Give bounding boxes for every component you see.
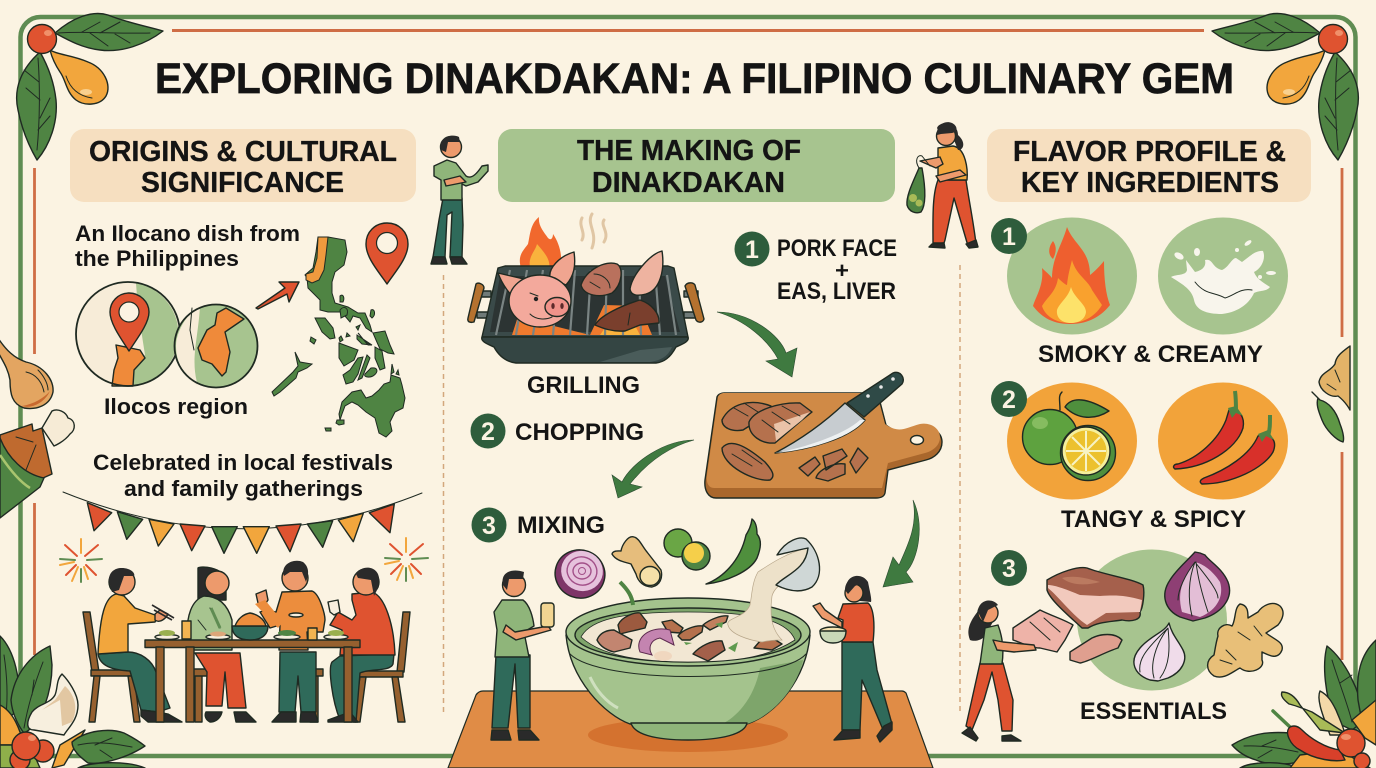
badge: 2: 2: [1002, 386, 1016, 414]
flavor: creamy: [1158, 218, 1288, 334]
arrow: grill to board: [717, 312, 797, 377]
icon: firework right: [385, 538, 428, 581]
icon: green chili: [706, 519, 760, 584]
heading: origins: [70, 129, 416, 202]
ingredients: essentials: [1013, 550, 1283, 690]
person: diner yellow sweater: [98, 568, 182, 722]
text: Ilocano dish: the Philippines: [75, 246, 239, 271]
person: man with bottle: [491, 571, 554, 740]
icon: calamansi: [664, 529, 710, 570]
illustration: mixing bowl: [566, 548, 810, 740]
corner ornament: top right: [1212, 14, 1358, 160]
corner ornament: bottom right: [1232, 640, 1376, 768]
person: diner green sweater: [187, 567, 256, 722]
badge: 1: [991, 218, 1027, 254]
badge: 2: [991, 381, 1027, 417]
badge: 1: 1: [1002, 223, 1016, 251]
corner ornament: bottom left: [0, 636, 145, 768]
map inset: region close up with pin: [76, 282, 180, 386]
label: essentials: ESSENTIALS: [1080, 698, 1227, 725]
bunting: [63, 492, 422, 553]
flavor: tangy: [1007, 382, 1137, 500]
map inset: region close up: [174, 304, 258, 388]
arrow: to map: [256, 282, 299, 309]
badge: 3: [991, 550, 1027, 586]
icon: grill with pork: [468, 214, 704, 363]
heading: making: THE MAKING OF: [577, 135, 801, 167]
badge: 3: 3: [1002, 555, 1016, 583]
person: woman carrying meat: [962, 601, 1036, 741]
text: festivals: Celebrated in local festivals: [93, 450, 393, 475]
heading: flavor: [987, 129, 1311, 202]
step 1: pork face label: PORK FACE: [777, 235, 897, 262]
icon: ginger: [612, 537, 662, 587]
step 1: pork face label: 1: [745, 236, 759, 264]
icon: cutting board with knife: [705, 372, 942, 498]
icon: pig face: [498, 252, 575, 327]
table shadow: [588, 718, 788, 752]
text: festivals: and family gatherings: [124, 476, 363, 501]
label: smoky and creamy: SMOKY & CREAMY: [1038, 341, 1263, 368]
heading: making: [498, 129, 895, 202]
step 1: pork face label: [734, 232, 897, 305]
text: Ilocano dish: [75, 221, 300, 271]
heading: making: DINAKDAKAN: [592, 167, 785, 199]
corner ornament: top left: [17, 14, 163, 160]
step 2: chopping label: CHOPPING: [515, 419, 644, 446]
panel: origins and cultural significance: [60, 129, 428, 722]
arrow: board to mixing: [612, 440, 694, 498]
step 3: mixing label: 3: [482, 512, 496, 540]
illustration: family at table: [83, 561, 410, 722]
step 1: pork face label: +: [835, 258, 849, 283]
icon: onion half: [548, 543, 612, 605]
side ornament: ginger and chili: [1312, 346, 1350, 442]
person: woman with bowl: [813, 576, 892, 742]
step 1: pork face label: EAS, LIVER: [777, 278, 896, 305]
text: Ilocano dish: An Ilocano dish from: [75, 221, 300, 246]
heading: flavor: FLAVOR PROFILE &: [1013, 136, 1286, 168]
heading: origins: SIGNIFICANCE: [141, 167, 344, 199]
text: festivals: [93, 450, 393, 501]
flavor: smoky: [1007, 218, 1137, 334]
step 2: chopping label: [470, 414, 644, 448]
title: EXPLORING DINAKDAKAN: A FILIPINO CULINARY GEM: [155, 55, 1234, 103]
panel: the making of dinakdakan: [431, 122, 978, 768]
heading: flavor: KEY INGREDIENTS: [1021, 167, 1279, 199]
person: presenter man: [431, 136, 488, 264]
label: tangy and spicy: TANGY & SPICY: [1061, 506, 1246, 533]
step 3: mixing label: MIXING: [517, 512, 605, 539]
panel: flavor profile and key ingredients: [962, 129, 1311, 741]
label: grilling: GRILLING: [527, 372, 640, 399]
table top: [448, 691, 933, 768]
step 2: chopping label: 2: [481, 418, 495, 446]
person: woman with bag: [907, 122, 978, 248]
map of the Philippines: [272, 237, 405, 437]
icon: pouring bowl: [776, 538, 820, 591]
arrow: board to bowl: [883, 500, 919, 587]
label: Ilocos region: Ilocos region: [104, 394, 248, 419]
flavor: spicy: [1158, 382, 1288, 500]
person: diner red sweater: [328, 568, 395, 722]
person: diner orange sweater: [255, 561, 325, 722]
icon: firework left: [60, 539, 102, 582]
dining table with food: [145, 613, 360, 722]
pouring sauce: [728, 548, 808, 642]
heading: origins: ORIGINS & CULTURAL: [89, 136, 397, 168]
step 3: mixing label: [472, 508, 605, 542]
side ornament: garlic and wrapped meat: [0, 338, 74, 518]
icon: location pin: [366, 223, 408, 284]
